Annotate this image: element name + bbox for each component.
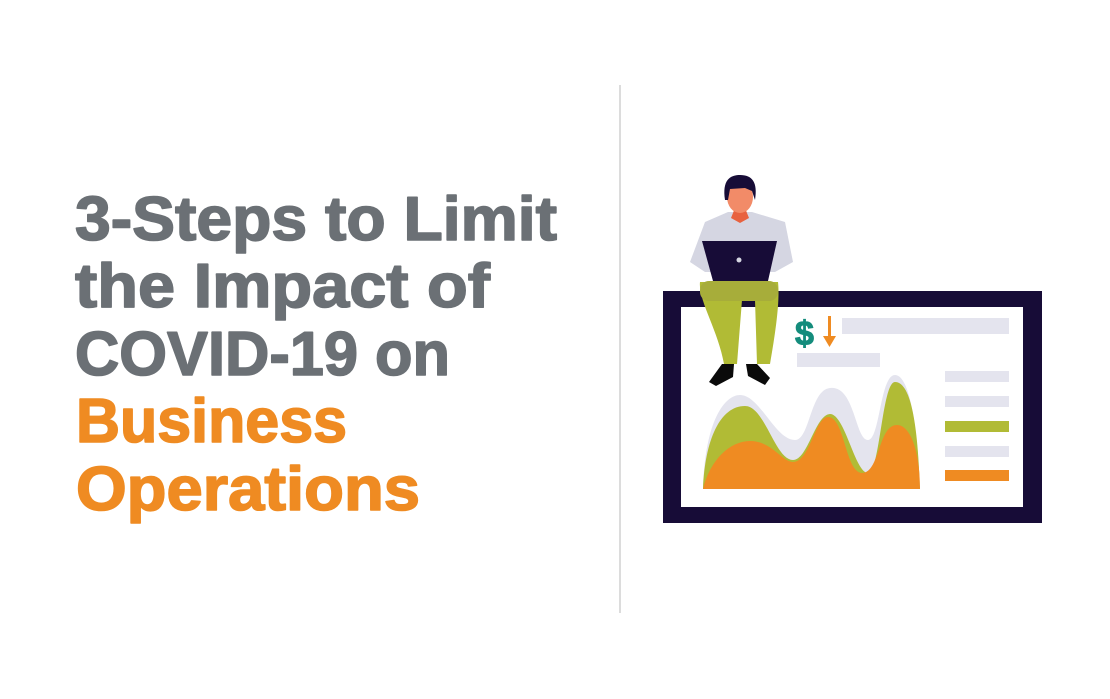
- legend bars: [945, 371, 1009, 481]
- divider: [619, 85, 621, 613]
- title: [74, 185, 558, 524]
- header bars: [797, 318, 1009, 367]
- title: 3-Steps to Limit: [75, 185, 557, 254]
- person with laptop: [690, 175, 793, 386]
- title: COVID-19 on: [75, 320, 450, 389]
- title: the Impact of: [75, 252, 490, 321]
- icon: dollar down: $: [795, 315, 814, 353]
- icon: dollar down: [795, 315, 836, 353]
- title: Operations: [76, 455, 420, 524]
- title: Business: [76, 387, 347, 456]
- area chart: [703, 375, 920, 489]
- dashboard frame: [663, 291, 1042, 523]
